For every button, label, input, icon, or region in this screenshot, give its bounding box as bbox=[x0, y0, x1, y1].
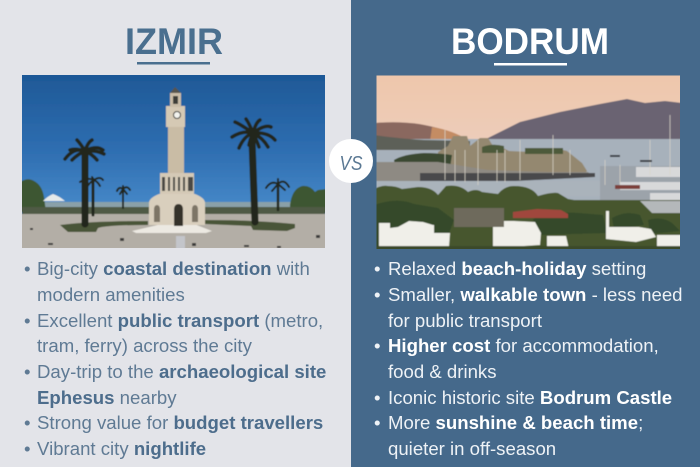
bullet: nightlife: Vibrant city nightlife bbox=[37, 438, 206, 459]
bullet: beach-holiday: Relaxed beach-holiday setting bbox=[388, 258, 646, 279]
VS badge bbox=[329, 139, 373, 183]
bullet: beach-holiday: • bbox=[374, 258, 381, 279]
heading: Bodrum: BODRUM bbox=[451, 21, 609, 62]
bullet: walkable town: for public transport bbox=[388, 310, 543, 331]
town buildings bbox=[379, 211, 682, 251]
bullet: higher cost: food & drinks bbox=[388, 361, 497, 382]
bullet: Bodrum Castle: • bbox=[374, 387, 381, 408]
Bodrum bullet list bbox=[374, 258, 683, 459]
bullet: higher cost: Higher cost for accommodation, bbox=[388, 335, 659, 356]
clock tower bbox=[149, 87, 205, 226]
bullet: archaeological site bbox=[24, 361, 326, 408]
bullet: walkable town: Smaller, walkable town - less need bbox=[388, 284, 683, 305]
marina bbox=[374, 162, 592, 183]
photo: Izmir clock tower bbox=[20, 73, 327, 250]
bullet: public transport: Excellent public transport (metro, bbox=[37, 310, 323, 331]
bullet: archaeological site: Ephesus nearby bbox=[37, 387, 177, 408]
bullet: walkable town bbox=[374, 284, 683, 331]
photo: Bodrum harbour and castle bbox=[374, 73, 682, 252]
bullet: archaeological site: • bbox=[24, 361, 31, 382]
bullet: public transport bbox=[24, 310, 323, 356]
bullet: budget travellers: Strong value for budget travellers bbox=[37, 412, 323, 433]
Izmir bullet list bbox=[24, 258, 326, 459]
birds bbox=[30, 228, 320, 248]
bullet: public transport: • bbox=[24, 310, 31, 331]
heading: Izmir: IZMIR bbox=[125, 21, 223, 62]
bullet: sunshine and beach time: • bbox=[374, 412, 381, 433]
bullet: higher cost: • bbox=[374, 335, 381, 356]
bullet: budget travellers: • bbox=[24, 412, 31, 433]
VS badge: VS bbox=[340, 153, 363, 175]
bullet: public transport: tram, ferry) across the city bbox=[37, 335, 253, 356]
bullet: coastal destination: • bbox=[24, 258, 31, 279]
plaza ground bbox=[20, 214, 327, 250]
hills bbox=[486, 99, 682, 140]
bullet: walkable town: • bbox=[374, 284, 381, 305]
bullet: Bodrum Castle: Iconic historic site Bodrum Castle bbox=[388, 387, 672, 408]
bullet: sunshine and beach time: quieter in off-season bbox=[388, 438, 556, 459]
palm trees bbox=[65, 119, 289, 224]
castle bbox=[438, 136, 587, 175]
bullet: coastal destination bbox=[24, 258, 310, 305]
background trees bbox=[20, 179, 327, 213]
panel: Izmir bbox=[22, 28, 325, 248]
water bbox=[374, 139, 682, 201]
bullet: coastal destination: modern amenities bbox=[37, 284, 185, 305]
bullet: nightlife: • bbox=[24, 438, 31, 459]
bullet: coastal destination: Big-city coastal destination with bbox=[37, 258, 310, 279]
panel: Bodrum bbox=[351, 0, 700, 467]
trees bbox=[442, 200, 680, 247]
bullet: sunshine and beach time bbox=[374, 412, 643, 459]
bullet: archaeological site: Day-trip to the archaeological site bbox=[37, 361, 326, 382]
bullet: sunshine and beach time: More sunshine & beach time; bbox=[388, 412, 643, 433]
bullet: higher cost bbox=[374, 335, 659, 382]
